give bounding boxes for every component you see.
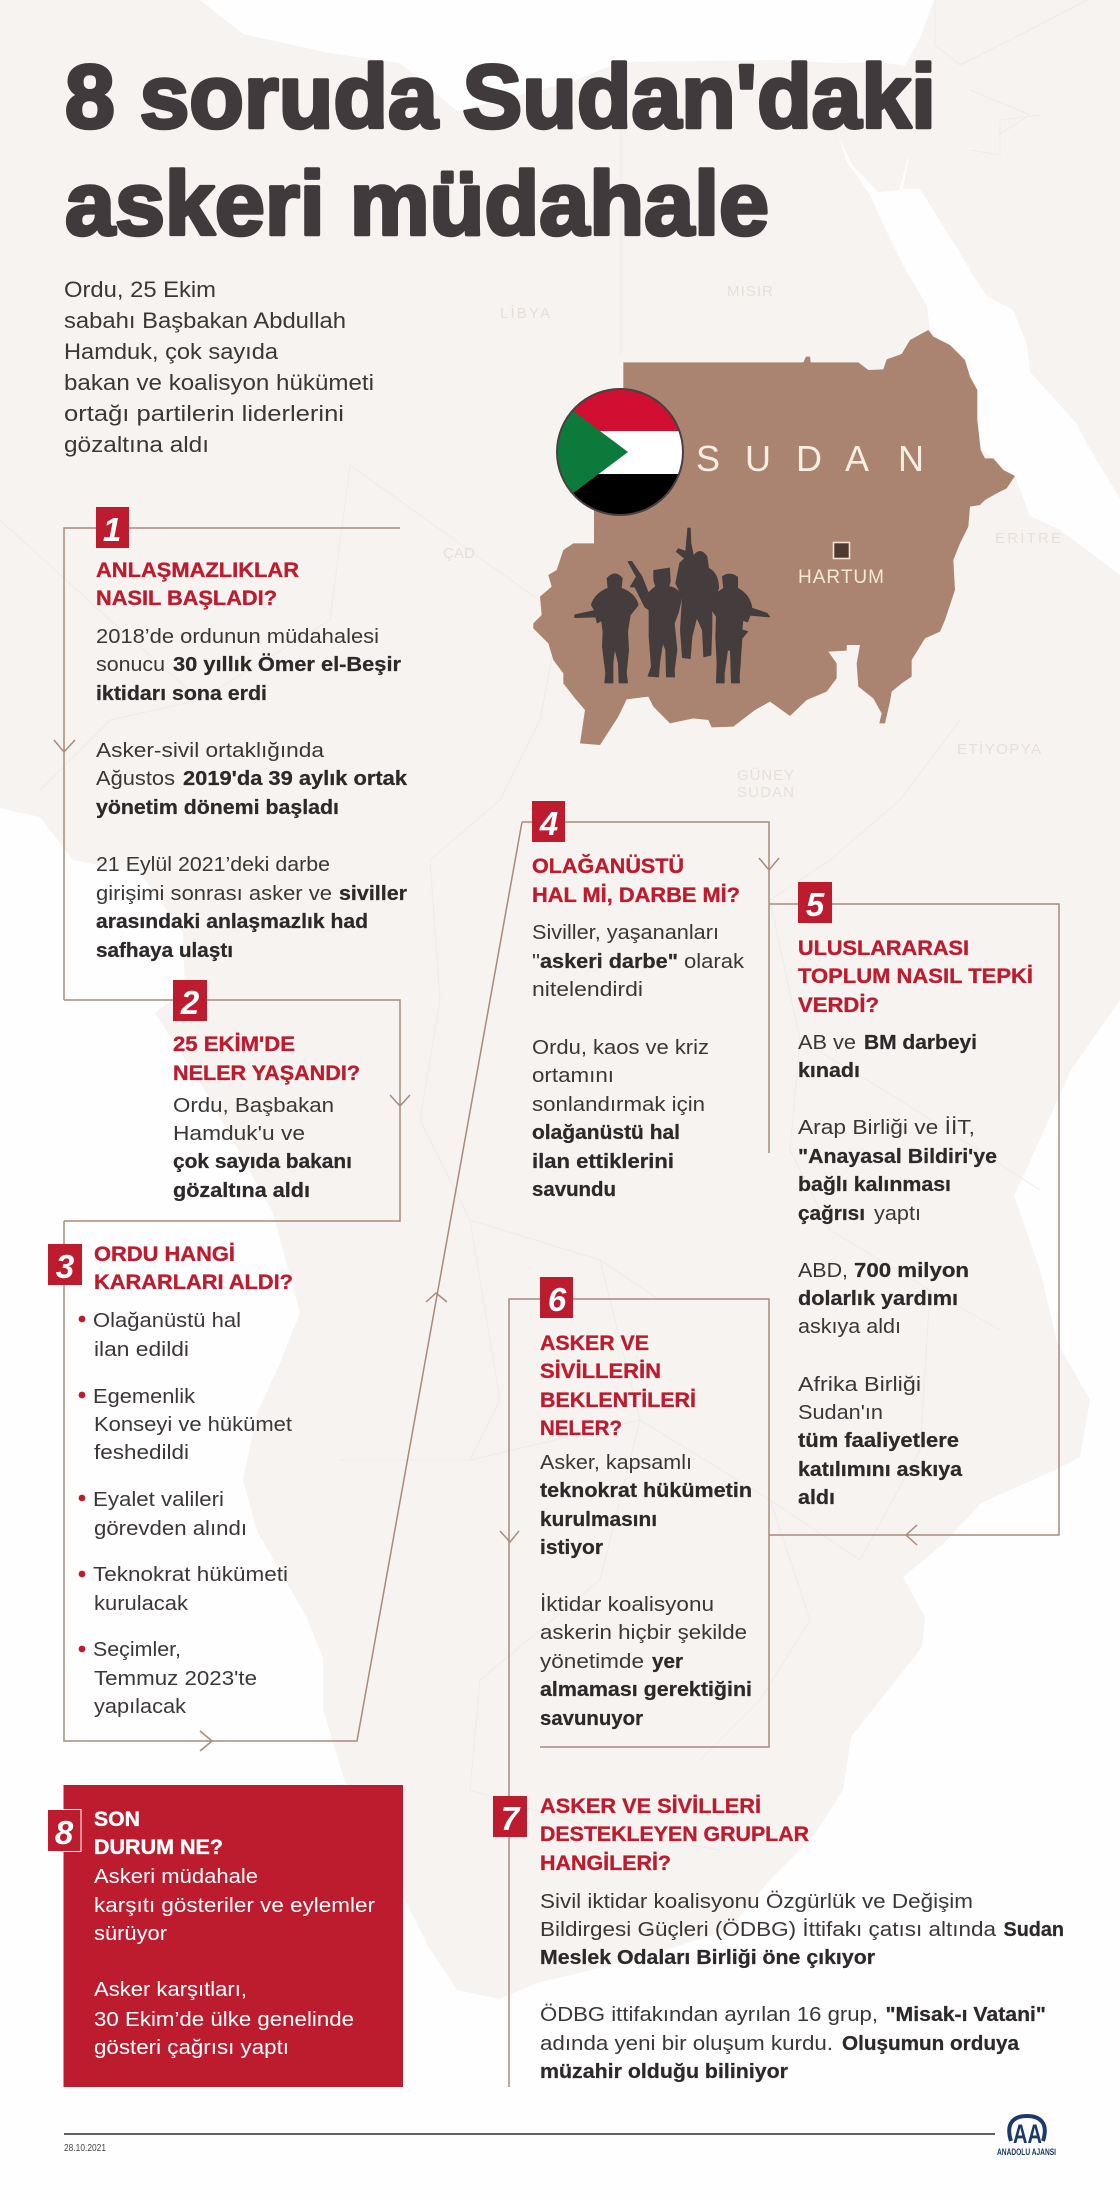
- arrow left: [906, 1525, 917, 1545]
- heading 4: OLAĞANÜSTÜ: [532, 854, 684, 878]
- heading 6: SİVİLLERİN: [540, 1360, 661, 1383]
- body text 6: Asker, kapsamlı: [540, 1451, 692, 1474]
- body text 5: çağrısı: [798, 1202, 865, 1225]
- body text 6: almaması gerektiğini: [540, 1678, 752, 1701]
- faint country labels: ERİTRE: [995, 529, 1061, 547]
- body text 4: sonlandırmak için: [532, 1093, 705, 1116]
- heading 3: ORDU HANGİ: [94, 1243, 235, 1266]
- bullet list: ilan edildi: [94, 1338, 189, 1361]
- body text 5: aldı: [798, 1486, 835, 1509]
- faint country labels: ÇAD: [443, 545, 475, 562]
- body text 8: Askeri müdahale: [94, 1865, 258, 1888]
- body text 7: ÖDBG ittifakından ayrılan 16 grup,: [540, 2003, 878, 2026]
- arrow right: [200, 1731, 212, 1751]
- heading 4: [532, 854, 740, 907]
- body text 1: arasındaki anlaşmazlık had: [96, 910, 368, 933]
- panel 6 frame: [509, 1299, 769, 2087]
- heading 8: SON: [94, 1808, 140, 1831]
- title: askeri müdahale: [65, 154, 769, 254]
- number badge 3: 3: [56, 1248, 74, 1285]
- body text 5: kınadı: [798, 1059, 860, 1082]
- heading 1: ANLAŞMAZLIKLAR: [96, 559, 299, 582]
- body text 1: girişimi sonrası asker ve: [96, 882, 332, 905]
- heading 8: [94, 1808, 223, 1859]
- body text 5: Arap Birliği ve İİT,: [798, 1116, 975, 1139]
- body text 2: gözaltına aldı: [173, 1179, 310, 1202]
- map of Sudan with flag and soldiers: [533, 330, 1015, 745]
- body text 6: istiyor: [540, 1536, 603, 1559]
- heading 6: [540, 1332, 696, 1440]
- heading 5: TOPLUM NASIL TEPKİ: [798, 965, 1033, 988]
- body text 1: 21 Eylül 2021’deki darbe: [96, 853, 330, 876]
- body text 6: savunuyor: [540, 1707, 643, 1730]
- soldiers silhouette: [575, 528, 769, 683]
- heading 1: NASIL BAŞLADI?: [96, 587, 277, 610]
- footer: [64, 2116, 1056, 2157]
- body text 7: [540, 1890, 1064, 2083]
- body text 7: Meslek Odaları Birliği öne çıkıyor: [540, 1946, 875, 1969]
- body text 5: [798, 1031, 997, 1509]
- body text 6: kurulmasını: [540, 1508, 657, 1531]
- number badge 7: [493, 1796, 527, 1837]
- number badge 7: 7: [501, 1800, 521, 1837]
- heading 6: ASKER VE: [540, 1332, 649, 1355]
- number badge 2: 2: [180, 984, 200, 1021]
- body text 2: Hamduk'u ve: [173, 1122, 305, 1145]
- body text 1: 2018’de ordunun müdahalesi: [96, 625, 379, 648]
- number badge 3: [48, 1244, 82, 1285]
- panel 4 frame: [522, 822, 769, 1153]
- number badge 2: [173, 980, 207, 1021]
- bullet list: Teknokrat hükümeti: [93, 1563, 288, 1586]
- arrow down: [759, 858, 779, 870]
- body text 5: Sudan'ın: [798, 1401, 883, 1424]
- body text 5: katılımını askıya: [798, 1458, 963, 1481]
- red background: [64, 1785, 403, 2087]
- title: [65, 48, 936, 254]
- number badge 8: [48, 1810, 81, 1852]
- body text 5: "Anayasal Bildiri'ye: [798, 1145, 997, 1168]
- body text 1: siviller: [339, 882, 407, 905]
- body text 5: Afrika Birliği: [798, 1373, 921, 1396]
- body text 4: askeri darbe": [540, 950, 678, 973]
- intro text: Ordu, 25 Ekim: [64, 277, 216, 302]
- bullet list: Temmuz 2023'te: [94, 1667, 257, 1690]
- body text 1: Asker-sivil ortaklığında: [96, 739, 325, 762]
- body text 8: sürüyor: [94, 1922, 167, 1945]
- bullet list: Olağanüstü hal: [93, 1309, 241, 1332]
- bullet list: [79, 1309, 292, 1718]
- panel 3 frame and diagonal connector: [64, 822, 522, 1741]
- heading 5: VERDİ?: [798, 994, 879, 1017]
- heading 5: ULUSLARARASI: [798, 937, 969, 960]
- heading 6: BEKLENTİLERİ: [540, 1389, 696, 1412]
- body text 6: askerin hiçbir şekilde: [540, 1621, 747, 1644]
- body text 1: Ağustos: [96, 767, 175, 790]
- heading 3: [94, 1243, 293, 1294]
- country label: SUDAN: [696, 438, 924, 479]
- heading 7: HANGİLERİ?: [540, 1852, 671, 1875]
- Anadolu Ajansı logo: [997, 2116, 1056, 2157]
- body text 5: bağlı kalınması: [798, 1173, 951, 1196]
- body text 4: nitelendirdi: [532, 978, 643, 1001]
- body text 4: ilan ettiklerini: [532, 1150, 674, 1173]
- capital label: HARTUM: [798, 567, 884, 588]
- intro text: ortağı partilerin liderlerini: [64, 401, 344, 426]
- bullet list: Konseyi ve hükümet: [94, 1413, 292, 1436]
- body text 1: iktidarı sona erdi: [96, 682, 267, 705]
- panel 2: 25 Ekim: [64, 980, 410, 1221]
- Sudan silhouette: [533, 330, 1015, 745]
- bullet list: görevden alındı: [94, 1517, 247, 1540]
- body text 4: Ordu, kaos ve kriz: [532, 1036, 709, 1059]
- heading 2: NELER YAŞANDI?: [173, 1062, 360, 1085]
- body text 5: dolarlık yardımı: [798, 1287, 958, 1310]
- number badge 5: [798, 882, 832, 923]
- body text 5: yaptı: [874, 1202, 921, 1225]
- flag of Sudan: [556, 388, 684, 516]
- bullet list: Eyalet valileri: [93, 1488, 224, 1511]
- body text 6: İktidar koalisyonu: [540, 1593, 714, 1616]
- faint country labels: [443, 283, 1061, 801]
- bullet list: feshedildi: [94, 1441, 189, 1464]
- heading 7: [540, 1795, 809, 1875]
- number badge 6: 6: [548, 1281, 567, 1318]
- panel 2 frame: [64, 1000, 400, 1221]
- body text 8: Asker karşıtları,: [94, 1978, 247, 2001]
- body text 4: ": [532, 950, 540, 973]
- faint country labels: LİBYA: [500, 304, 550, 322]
- body text 5: ABD,: [798, 1259, 848, 1282]
- body text 8: 30 Ekim’de ülke genelinde: [94, 2008, 354, 2031]
- arrow down: [54, 740, 75, 752]
- number badge 5: 5: [806, 886, 825, 923]
- intro text: [64, 277, 374, 457]
- faint country labels: ETİYOPYA: [957, 740, 1041, 758]
- body text 2: [173, 1094, 352, 1202]
- heading 1: [96, 559, 299, 610]
- number badge 1: 1: [103, 511, 121, 548]
- panel 5 frame: [769, 904, 1059, 1535]
- body text 7: Sudan: [1004, 1918, 1064, 1941]
- panel 8: son durum: [48, 1785, 403, 2087]
- body text 1: [96, 625, 408, 962]
- title: 8 soruda Sudan'daki: [65, 48, 936, 148]
- heading 3: KARARLARI ALDI?: [94, 1271, 293, 1294]
- heading 2: 25 EKİM'DE: [173, 1033, 295, 1056]
- body text 6: yer: [652, 1650, 683, 1673]
- heading 8: DURUM NE?: [94, 1836, 223, 1859]
- body text 1: 30 yıllık Ömer el-Beşir: [173, 653, 401, 676]
- body text 5: BM darbeyi: [864, 1031, 977, 1054]
- body text 5: askıya aldı: [798, 1315, 901, 1338]
- arrow down: [390, 1095, 410, 1106]
- faint country labels: SUDAN: [737, 784, 794, 801]
- body text 7: adında yeni bir oluşum kurdu.: [540, 2032, 833, 2055]
- faint country labels: MISIR: [727, 283, 773, 300]
- body text 4: Siviller, yaşananları: [532, 921, 719, 944]
- bullet list: kurulacak: [94, 1592, 189, 1615]
- arrow down: [500, 1531, 519, 1542]
- body text 1: yönetim dönemi başladı: [96, 796, 339, 819]
- panel 5: uluslararası tepki: [769, 882, 1059, 1545]
- intro text: bakan ve koalisyon hükümeti: [64, 370, 374, 395]
- footer rule: [64, 2133, 995, 2135]
- body text 2: çok sayıda bakanı: [173, 1150, 352, 1173]
- body text 4: [532, 921, 745, 1201]
- body text 7: müzahir olduğu biliniyor: [540, 2060, 788, 2083]
- body text 4: olağanüstü hal: [532, 1121, 680, 1144]
- bullet list: yapılacak: [94, 1695, 187, 1718]
- date: 28.10.2021: [64, 2143, 106, 2154]
- heading 4: HAL Mİ, DARBE Mİ?: [532, 884, 740, 907]
- panel 7: destekleyen gruplar: [493, 1795, 1064, 2083]
- panel 4: olağanüstü hal mi darbe mi: [522, 801, 779, 1201]
- body text 1: sonucu: [96, 653, 165, 676]
- body text 6: yönetimde: [540, 1650, 644, 1673]
- arrow up on diagonal: [426, 1293, 447, 1302]
- body text 7: "Misak-ı Vatani": [886, 2003, 1046, 2026]
- body text 5: AB ve: [798, 1031, 856, 1054]
- body text 4: ortamını: [532, 1064, 614, 1087]
- heading 7: DESTEKLEYEN GRUPLAR: [540, 1823, 809, 1846]
- panel 3: ordu hangi kararları aldı: [48, 822, 522, 1751]
- body text 8: [94, 1865, 375, 2059]
- Anadolu Ajansı logo: AA: [1013, 2119, 1042, 2149]
- heading 6: NELER?: [540, 1417, 622, 1440]
- bullet list: Seçimler,: [93, 1638, 181, 1661]
- body text 6: [540, 1451, 752, 1730]
- body text 1: safhaya ulaştı: [96, 939, 233, 962]
- panel 6: beklentiler: [500, 1277, 769, 2087]
- heading 2: [173, 1033, 360, 1085]
- body text 7: Bildirgesi Güçleri (ÖDBG) İttifakı çatısı altında: [540, 1918, 997, 1941]
- body text 8: karşıtı gösteriler ve eylemler: [94, 1894, 375, 1917]
- bullet list: Egemenlik: [93, 1385, 196, 1408]
- body text 8: gösteri çağrısı yaptı: [94, 2036, 289, 2059]
- body text 6: teknokrat hükümetin: [540, 1479, 752, 1502]
- number badge 8: 8: [55, 1814, 74, 1851]
- intro text: gözaltına aldı: [64, 432, 209, 457]
- capital marker: [834, 542, 850, 558]
- body text 4: olarak: [684, 950, 745, 973]
- Anadolu Ajansı logo: ANADOLU AJANSI: [997, 2147, 1056, 2157]
- faint country labels: GÜNEY: [737, 766, 794, 784]
- number badge 6: [540, 1277, 573, 1318]
- heading 5: [798, 937, 1033, 1017]
- panel 1: anlaşmazlıklar: [54, 507, 408, 1000]
- panel 1 frame: [64, 528, 400, 1000]
- number badge 4: 4: [539, 805, 558, 842]
- body text 5: 700 milyon: [854, 1259, 969, 1282]
- body text 4: savundu: [532, 1178, 616, 1201]
- body text 1: 2019'da 39 aylık ortak: [183, 767, 408, 790]
- body text 7: Oluşumun orduya: [842, 2032, 1020, 2055]
- heading 7: ASKER VE SİVİLLERİ: [540, 1795, 761, 1818]
- intro text: sabahı Başbakan Abdullah: [64, 308, 346, 333]
- body text 5: tüm faaliyetlere: [798, 1429, 959, 1452]
- number badge 1: [96, 507, 129, 548]
- intro text: Hamduk, çok sayıda: [64, 339, 279, 364]
- body text 2: Ordu, Başbakan: [173, 1094, 334, 1117]
- number badge 4: [532, 801, 565, 842]
- body text 7: Sivil iktidar koalisyonu Özgürlük ve Değişim: [540, 1890, 973, 1913]
